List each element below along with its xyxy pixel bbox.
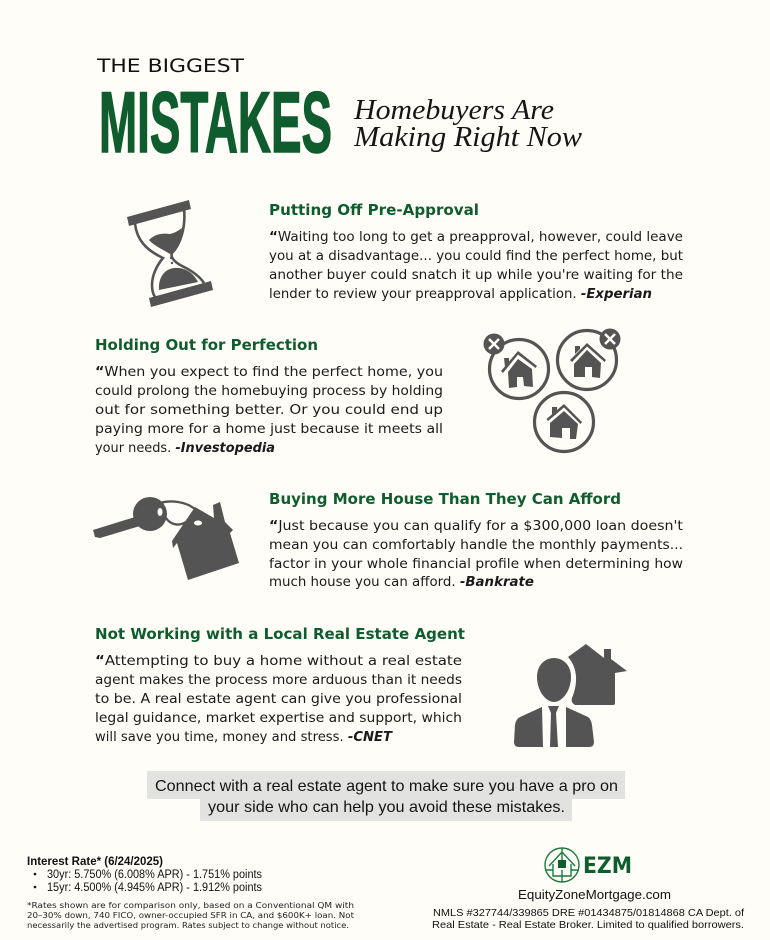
heading: Not Working with a Local Real Estate Agent <box>95 625 466 643</box>
text block: “Waiting too long to get a preapproval, however, could leave <box>269 229 683 245</box>
title: Homebuyers Are <box>353 94 554 126</box>
website: EquityZoneMortgage.com <box>518 887 671 902</box>
text block: “Just because you can qualify for a $300,000 loan doesn't <box>269 518 683 534</box>
rate disclaimer: *Rates shown are for comparison only, based on a Conventional QM with <box>27 900 354 910</box>
text block: “When you expect to find the perfect home, you <box>95 364 443 380</box>
title: THE BIGGEST <box>96 55 244 77</box>
icon: houses in circles <box>484 328 620 452</box>
text block <box>269 518 683 590</box>
text block <box>95 364 443 456</box>
heading: Putting Off Pre-Approval <box>269 201 479 219</box>
title: Making Right Now <box>353 121 583 153</box>
panel: buying more house than they can afford <box>93 490 683 590</box>
callout <box>147 771 625 821</box>
icon: house key <box>93 497 239 580</box>
rate disclaimer <box>27 900 355 930</box>
text block: another buyer could snatch it up while you're waiting for the <box>269 267 683 283</box>
text block: much house you can afford. -Bankrate <box>269 574 534 590</box>
text block <box>95 653 462 745</box>
heading: Buying More House Than They Can Afford <box>269 490 621 508</box>
text block: “Attempting to buy a home without a real estate <box>95 653 462 669</box>
text block: mean you can comfortably handle the monthly payments... <box>269 537 683 553</box>
icon: x badge left <box>484 334 504 354</box>
interest rates: 15yr: 4.500% (4.945% APR) - 1.912% points <box>47 882 262 894</box>
text block: to be. A real estate agent can give you professional <box>95 691 462 707</box>
text block: legal guidance, market expertise and support, which <box>95 710 462 726</box>
panel: holding out for perfection <box>95 328 620 456</box>
license text: NMLS #327744/339865 DRE #01434875/01814868 CA Dept. of <box>433 907 744 919</box>
logo: EZM <box>545 848 632 882</box>
interest rates: Interest Rate* (6/24/2025) <box>27 856 163 868</box>
rate disclaimer: 20–30% down, 740 FICO, owner-occupied SFR in CA, and $600K+ loan. Not <box>27 910 355 920</box>
text block: your needs. -Investopedia <box>95 440 275 456</box>
text block: factor in your whole financial profile when determining how <box>269 556 683 572</box>
text block: lender to review your preapproval application. -Experian <box>269 286 652 302</box>
text block <box>269 229 683 302</box>
text block: will save you time, money and stress. -CNET <box>95 729 394 745</box>
interest rates <box>27 856 262 894</box>
logo: EZM: EZM <box>583 854 632 879</box>
text block: could prolong the homebuying process by holding <box>95 383 443 399</box>
panel: putting off pre-approval <box>127 200 683 307</box>
text block: you at a disadvantage... you could find the perfect home, but <box>269 248 683 264</box>
icon: hourglass <box>127 200 213 307</box>
title: MISTAKES <box>99 75 332 171</box>
interest rates: 30yr: 5.750% (6.008% APR) - 1.751% points <box>47 869 262 881</box>
license text: Real Estate - Real Estate Broker. Limited to qualified borrowers. <box>432 919 744 931</box>
license text <box>432 907 744 931</box>
rate disclaimer: necessarily the advertised program. Rates subject to change without notice. <box>27 920 349 930</box>
text block: paying more for a home just because it meets all <box>95 421 443 437</box>
panel: not working with a local agent <box>95 625 627 747</box>
callout: Connect with a real estate agent to make sure you have a pro on <box>155 778 618 795</box>
icon: agent and house <box>514 644 627 747</box>
heading: Holding Out for Perfection <box>95 336 318 354</box>
icon: x badge right <box>600 328 620 350</box>
text block: out for something better. Or you could end up <box>95 402 443 418</box>
callout: your side who can help you avoid these mistakes. <box>208 799 565 816</box>
text block: agent makes the process more arduous than it needs <box>95 672 462 688</box>
